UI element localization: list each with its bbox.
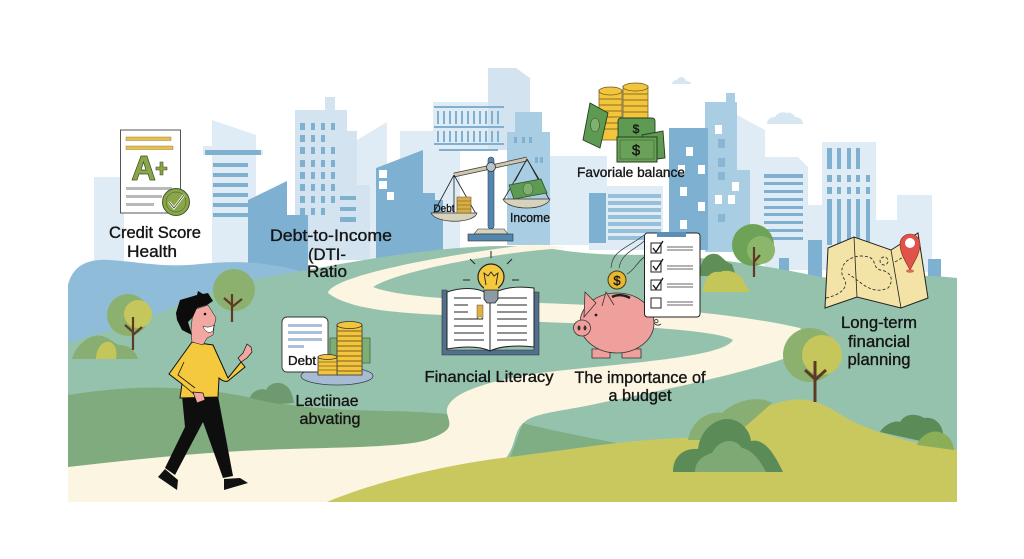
label: debt-to-income ratio: (DTI- (308, 246, 346, 264)
winding road path (68, 245, 815, 502)
legs (165, 396, 233, 478)
shoes (158, 469, 248, 490)
label: the importance of a budget (574, 369, 706, 405)
label: financial literacy: Financial Literacy (424, 369, 554, 386)
label: long-term financial planning: planning (848, 351, 910, 369)
clouds (672, 77, 803, 124)
icon: checklist clipboard (644, 232, 700, 317)
foreground yellow-green hill (327, 399, 957, 502)
label: the importance of a budget: The importance of (574, 369, 706, 387)
label: lactiinae abvating: Lactiinae (296, 393, 359, 410)
label: debt-to-income ratio (270, 227, 392, 281)
label: long-term financial planning: Long-term (841, 314, 917, 332)
label: debt-to-income ratio: Ratio (307, 263, 347, 281)
label: the importance of a budget: a budget (608, 387, 672, 405)
hair (176, 291, 213, 335)
hands (238, 344, 252, 362)
icon: falling coin: $ (613, 273, 621, 288)
icon: coins and cash: $ (633, 122, 640, 136)
city skyline background (94, 68, 941, 279)
icon: coins and cash: $ (632, 142, 641, 159)
label: lactiinae abvating (296, 393, 360, 428)
label: debt-to-income ratio: Debt-to-Income (270, 227, 392, 245)
label: long-term financial planning: financial (848, 333, 910, 351)
icon: treasure map with pin (825, 233, 928, 308)
icon: piggy bank (574, 292, 661, 358)
icon: debt document and coins (282, 317, 373, 385)
head (191, 305, 216, 345)
icon: open book (442, 287, 539, 355)
icon: falling coin (608, 235, 646, 289)
label: debt on scale: Debt (434, 203, 454, 215)
icon: balance scale (431, 157, 550, 241)
icon: credit report document (120, 130, 190, 216)
character: walking person (158, 291, 252, 490)
icon: lightbulb (463, 251, 519, 303)
torso and arms (169, 342, 245, 398)
label: income: Income (510, 211, 550, 225)
label: lactiinae abvating: abvating (300, 411, 360, 428)
trees (107, 224, 842, 402)
landscape: hills (68, 246, 957, 502)
label: credit score health (109, 224, 201, 261)
label: favoriale balance: Favoriale balance (577, 164, 685, 180)
label: credit score health: Credit Score (109, 224, 201, 242)
icon: debt document and coins: Debt (288, 354, 317, 368)
label: credit score health: Health (127, 243, 177, 261)
bushes (72, 254, 954, 472)
icon: coins and cash (583, 83, 665, 162)
label: long-term financial planning (841, 314, 917, 369)
